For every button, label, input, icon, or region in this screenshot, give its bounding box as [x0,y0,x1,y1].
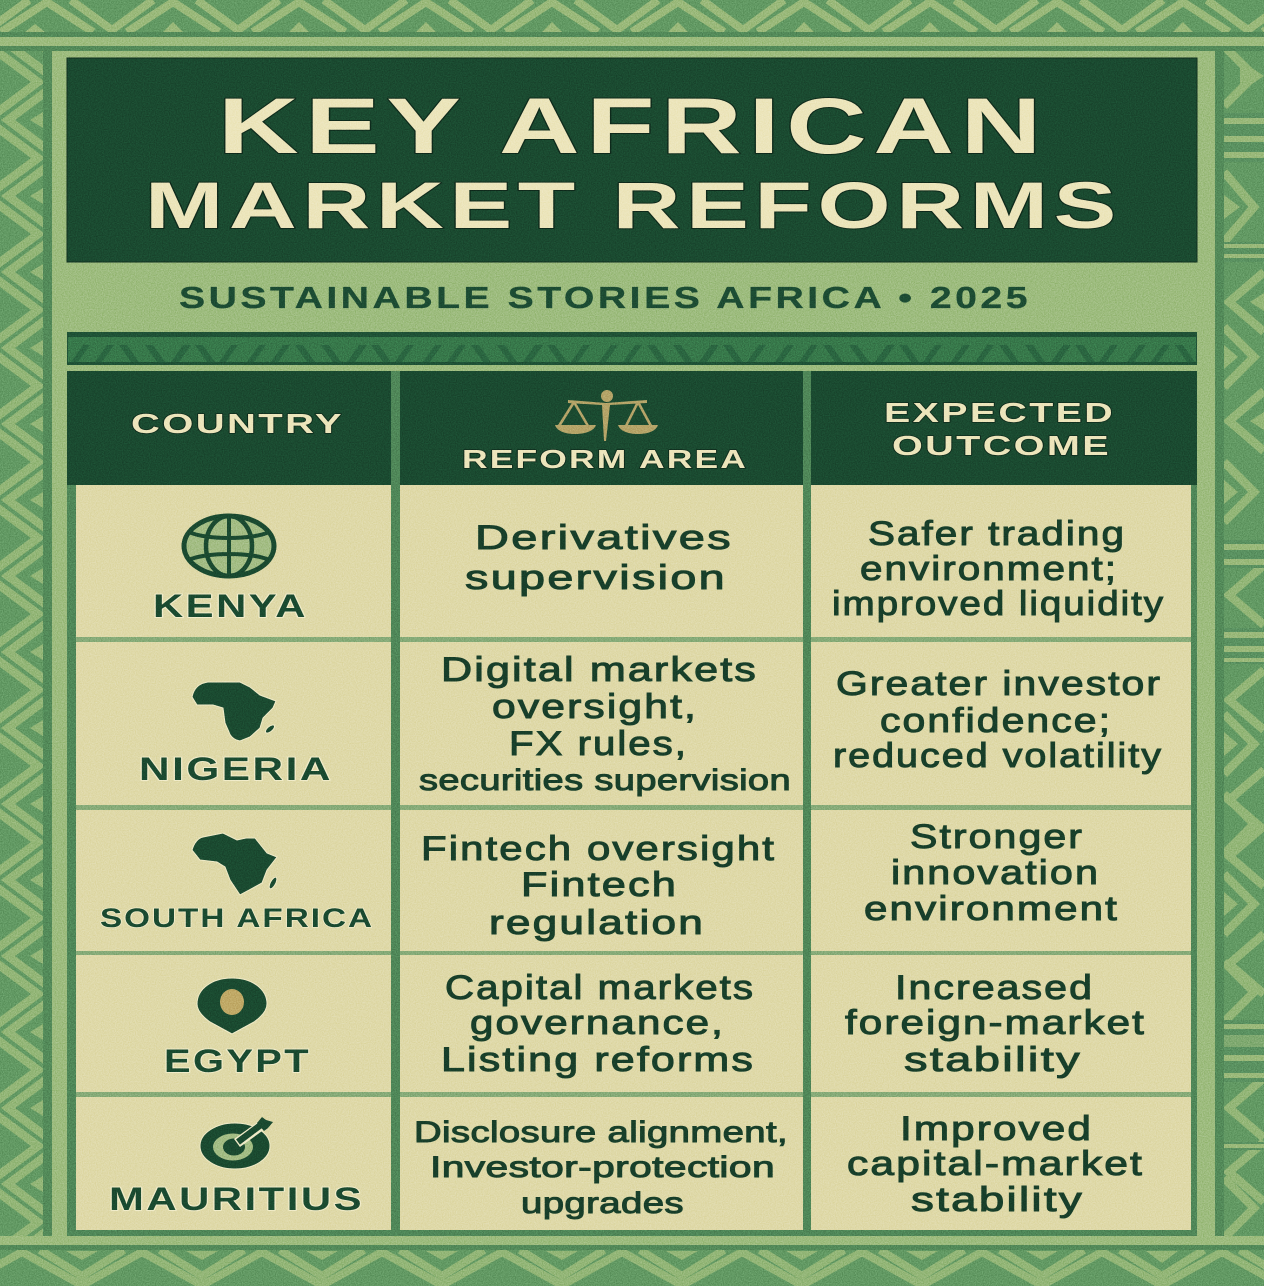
bottom border pattern [0,1250,1264,1286]
outcome: Mauritius: stability [911,1181,1084,1219]
icon: target with arrow [200,1117,273,1169]
reform: Egypt: governance, [470,1004,725,1042]
outcome: Egypt [845,969,1146,1079]
reform: Egypt: Listing reforms [441,1041,755,1079]
reform: Nigeria: Digital markets [441,651,758,689]
reform: Kenya: Derivatives [475,519,733,557]
header: expected outcome: EXPECTED [884,397,1115,428]
row: Egypt [76,955,1191,1092]
title line 1: KEY AFRICAN [218,81,1048,170]
reform: Nigeria: FX rules, [509,725,688,763]
icon: Africa map [192,682,276,741]
top border pattern [0,0,1264,32]
row: Mauritius [76,1097,1191,1230]
outcome: Nigeria [833,665,1163,775]
label: South Africa: SOUTH AFRICA [100,903,374,933]
icon: location pin [197,978,267,1034]
reform: Kenya [465,519,733,597]
reform: Mauritius: Investor-protection [430,1151,775,1184]
header row [67,371,1197,485]
outcome: Mauritius [847,1110,1144,1219]
header: expected outcome: OUTCOME [892,430,1111,461]
reform: Egypt: Capital markets [445,969,755,1007]
row: Nigeria [76,642,1191,805]
reform: South Africa: Fintech oversight [421,830,776,868]
subtitle: SUSTAINABLE STORIES AFRICA • 2025 [179,280,1031,315]
reform: South Africa [421,830,776,942]
reform: Mauritius: upgrades [521,1187,684,1220]
reform: Mauritius [414,1116,788,1220]
outcome: Kenya [832,515,1165,623]
reform: South Africa: regulation [489,904,705,942]
reform: Kenya: supervision [465,559,727,597]
title line 2: MARKET REFORMS [145,168,1122,242]
decorative pattern band [67,332,1197,365]
icon: Africa map [192,833,278,895]
outcome: Egypt: Increased [895,969,1094,1007]
outcome: South Africa: environment [864,890,1119,928]
label: Nigeria: NIGERIA [139,751,333,787]
reform: Nigeria: oversight, [492,688,698,726]
outcome: Egypt: stability [904,1041,1082,1079]
reform: South Africa: Fintech [521,866,678,904]
header: country: COUNTRY [131,408,344,439]
right border pattern [1224,46,1264,1238]
label: Egypt: EGYPT [164,1043,311,1079]
outcome: Mauritius: Improved [900,1110,1093,1148]
icon: scales of justice [555,390,658,441]
label: Kenya: KENYA [153,588,308,624]
left border pattern [0,51,43,1236]
header: expected outcome [884,397,1115,461]
title banner [67,58,1197,262]
row: Kenya [76,485,1191,637]
outcome: Nigeria: reduced volatility [833,737,1163,775]
outcome: Kenya: Safer trading [868,515,1126,553]
label: Mauritius: MAURITIUS [109,1181,364,1217]
reform: Nigeria: securities supervision [419,764,791,797]
reform: Egypt [441,969,755,1079]
table background [67,371,1197,1236]
outcome: Kenya: environment; [860,550,1118,588]
header: reform area: REFORM AREA [462,444,748,474]
row: South Africa [76,810,1191,951]
reform: Nigeria [419,651,791,797]
outcome: South Africa: Stronger [910,818,1084,856]
outcome: Mauritius: capital-market [847,1145,1144,1183]
outcome: Nigeria: confidence; [880,702,1112,740]
outcome: Egypt: foreign-market [845,1004,1146,1042]
icon: globe [184,516,274,576]
table [67,371,1197,1236]
outcome: Kenya: improved liquidity [832,585,1165,623]
outcome: South Africa: innovation [891,854,1100,892]
outcome: South Africa [864,818,1119,928]
outcome: Nigeria: Greater investor [836,665,1162,703]
reform: Mauritius: Disclosure alignment, [414,1116,788,1149]
